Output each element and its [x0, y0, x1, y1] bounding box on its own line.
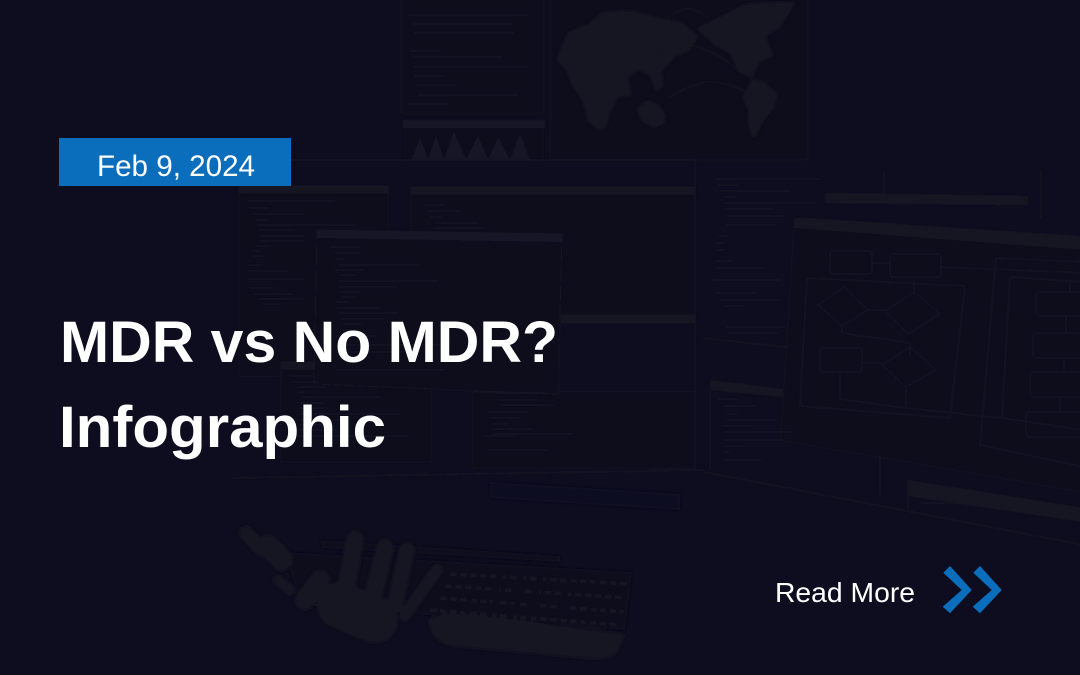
flowchart — [800, 251, 1080, 467]
title — [59, 310, 558, 460]
date text: Feb 9, 2024 — [97, 150, 255, 183]
title: Infographic — [59, 395, 386, 460]
keyboard — [285, 482, 680, 659]
title: MDR vs No MDR? — [60, 310, 558, 375]
upper left code monitor — [402, 0, 545, 160]
read more link: Read More — [775, 577, 915, 608]
read more link — [775, 566, 1002, 613]
hand on keyboard — [246, 533, 437, 620]
date badge — [59, 138, 291, 186]
right monitor code lines — [714, 179, 980, 503]
world map monitor — [551, 0, 807, 159]
icon: double chevron arrow — [943, 566, 1002, 613]
central code lines — [247, 201, 574, 450]
central monitor windows — [230, 160, 705, 478]
right monitor with flowchart — [702, 170, 1080, 545]
